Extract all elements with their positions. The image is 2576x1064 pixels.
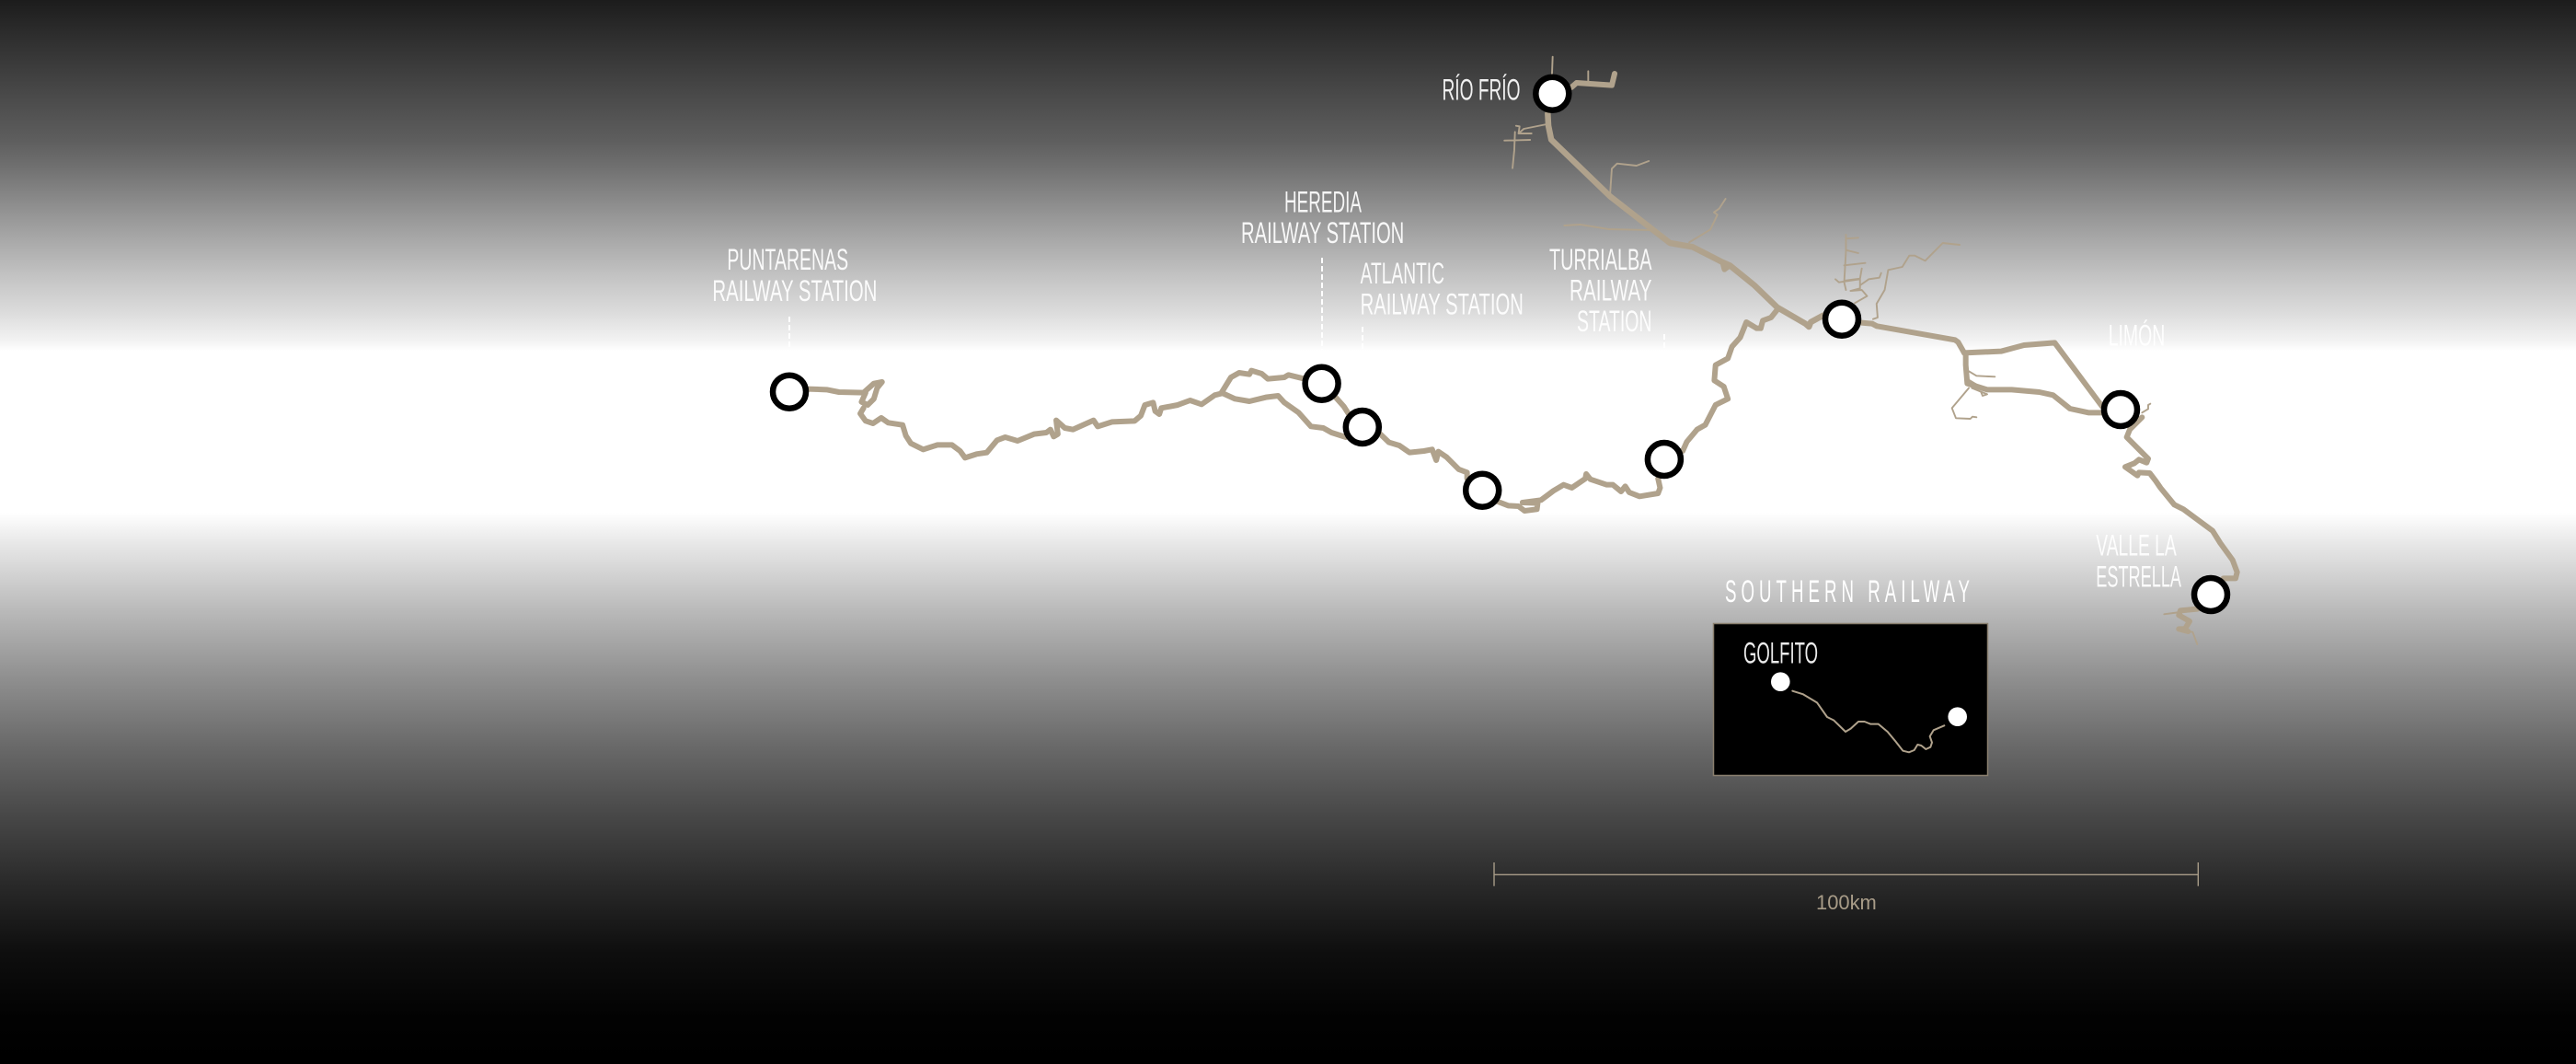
inset background — [1713, 624, 1987, 775]
label: Limón: LIMÓN — [2109, 319, 2165, 353]
station marker: Turrialba — [1648, 443, 1681, 476]
station marker: Valle la Estrella — [2194, 578, 2227, 611]
heading: Southern Railway: SOUTHERN RAILWAY — [1725, 573, 1970, 608]
leader line: Puntarenas — [788, 317, 790, 350]
label: Valle la Estrella: ESTRELLA — [2096, 560, 2181, 593]
leader line: Atlantic — [1362, 327, 1363, 350]
label: Heredia Railway Station: RAILWAY STATION — [1241, 216, 1404, 249]
railway: Limón and Valle la Estrella lines — [1861, 323, 2237, 631]
inset panel: Southern Railway map — [1713, 624, 1987, 775]
station marker: Limón — [2104, 393, 2137, 426]
station marker: Atlantic — [1346, 411, 1379, 444]
label: Atlantic Railway Station: RAILWAY STATION — [1361, 287, 1524, 320]
railway: Río Frío line — [1547, 74, 1823, 327]
railway: central valley to Turrialba junction — [1222, 310, 1777, 511]
label: Turrialba Railway Station: RAILWAY — [1570, 273, 1652, 306]
label: Río Frío: RÍO FRÍO — [1443, 73, 1520, 106]
leader line: Heredia — [1321, 258, 1323, 350]
label: Atlantic Railway Station — [1361, 257, 1524, 320]
label: Puntarenas Railway Station: PUNTARENAS — [727, 243, 848, 276]
leader line: Turrialba — [1663, 334, 1665, 350]
station marker: Río Frío — [1535, 77, 1569, 110]
railway branches: thin lines near Río Frío and junction — [1504, 57, 1960, 319]
label: Valle la Estrella — [2096, 529, 2181, 593]
station marker: Puntarenas — [773, 376, 806, 409]
scale bar label: 100km — [1816, 891, 1877, 914]
label: Puntarenas Railway Station — [712, 243, 877, 307]
label: Heredia Railway Station: HEREDIA — [1284, 186, 1362, 219]
inset label: Golfito: GOLFITO — [1743, 636, 1818, 669]
station marker: central valley — [1466, 474, 1499, 507]
scale bar line — [1494, 862, 2198, 886]
inset dot: route end — [1948, 707, 1967, 726]
inset route — [1792, 691, 1944, 752]
label: Valle la Estrella: VALLE LA — [2096, 529, 2177, 562]
label: Turrialba Railway Station — [1549, 243, 1652, 338]
station markers — [773, 77, 2227, 611]
inset dot: Golfito — [1771, 672, 1790, 691]
label: Turrialba Railway Station: TURRIALBA — [1549, 243, 1652, 276]
label: Heredia Railway Station — [1241, 186, 1404, 249]
label: Turrialba Railway Station: STATION — [1577, 305, 1652, 338]
railway branches: thin lines near Limón — [1952, 371, 2197, 644]
label: Atlantic Railway Station: ATLANTIC — [1361, 257, 1444, 290]
railway: Puntarenas to central valley — [808, 382, 1222, 457]
label: Puntarenas Railway Station: RAILWAY STATION — [712, 274, 877, 307]
railway network map — [808, 57, 2237, 644]
station marker: junction — [1825, 303, 1858, 336]
station marker: Heredia — [1305, 367, 1339, 400]
